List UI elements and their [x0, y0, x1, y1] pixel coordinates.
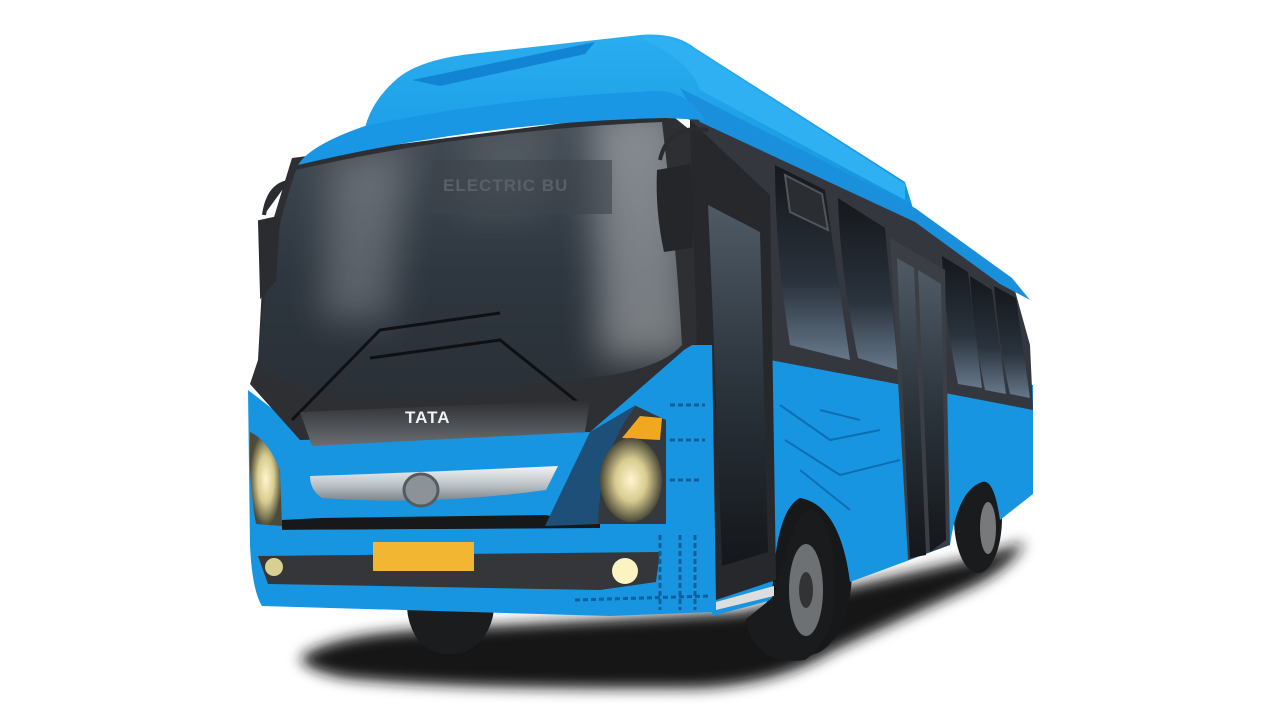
mirror — [657, 129, 708, 252]
wipers — [292, 313, 585, 420]
ground shadow — [300, 542, 1025, 688]
left mirror — [260, 182, 288, 294]
side upper glass band — [690, 100, 1033, 410]
illustration: blue electric bus — [248, 34, 1033, 700]
front dark frame — [250, 110, 697, 440]
front door — [690, 120, 776, 610]
bumper band — [258, 552, 660, 590]
destination sign — [432, 160, 612, 214]
front blue lower body — [248, 345, 714, 616]
circuit graphic on front — [575, 405, 710, 610]
destination sign: ELECTRIC BU — [443, 176, 568, 195]
rear wheel — [954, 463, 1002, 573]
side circuit pattern — [780, 405, 900, 510]
front wheel — [745, 509, 835, 661]
front left wheel — [407, 608, 494, 654]
dark circuit wedge — [545, 405, 636, 526]
windshield — [260, 122, 682, 398]
fog lamps — [265, 558, 638, 584]
chrome bar — [310, 466, 558, 501]
left headlamp — [250, 432, 282, 526]
roof pod — [365, 35, 915, 215]
lower grille slot — [282, 515, 600, 530]
side roof strip — [680, 88, 1030, 300]
side windows — [775, 165, 1030, 398]
grille panel with logo: TATA — [405, 408, 451, 427]
emblem — [404, 474, 438, 506]
blue cap above windshield — [298, 91, 705, 165]
side lower blue panel — [690, 340, 1033, 655]
licence plate — [373, 542, 474, 571]
grille panel with logo — [300, 400, 590, 446]
centre door — [890, 238, 950, 560]
windshield reflections — [320, 105, 695, 360]
right headlamp — [598, 406, 666, 524]
blue band above bumper — [250, 528, 700, 556]
